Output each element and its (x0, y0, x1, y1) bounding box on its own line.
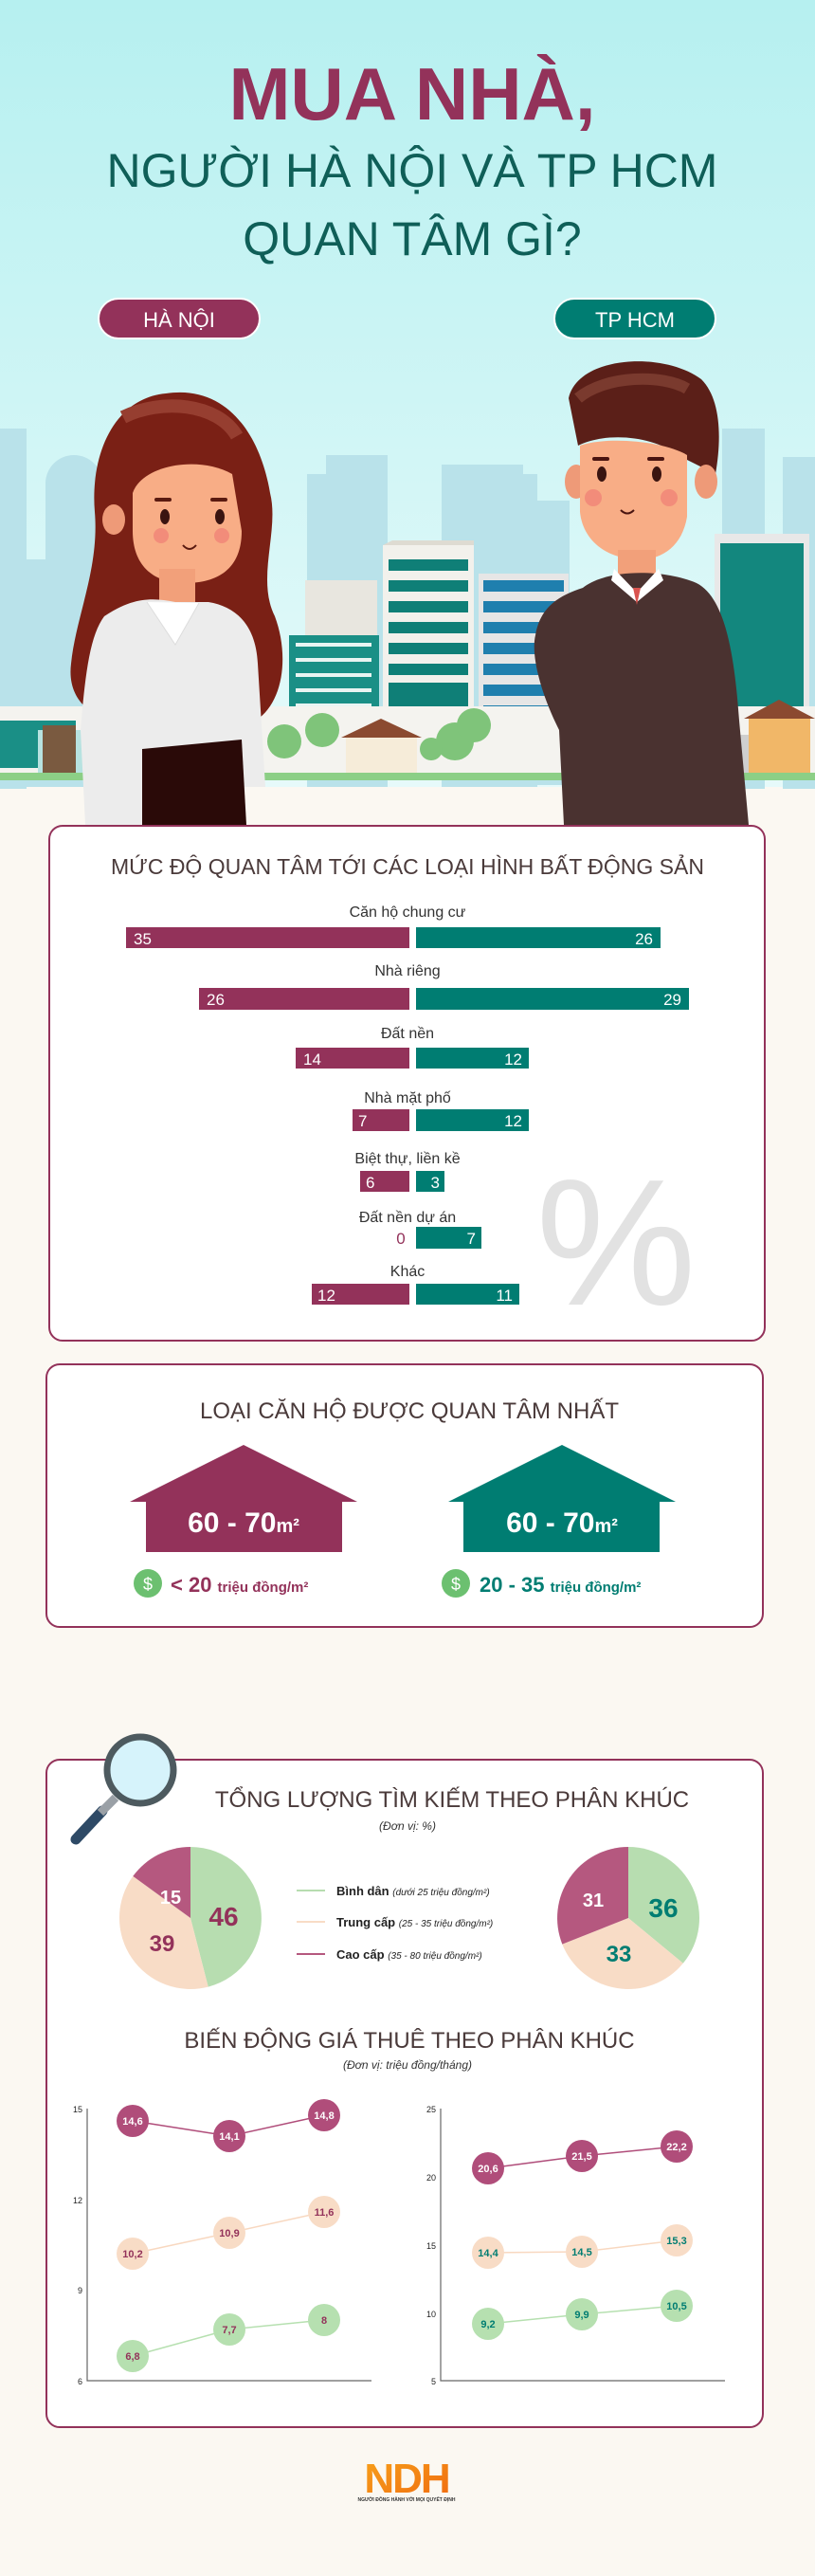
line chart: Ha Noi: 14,6 (122, 2116, 143, 2128)
bar chart: 14 (303, 1050, 321, 1069)
house: Ha Noi: 60 - 70m² (188, 1507, 299, 1539)
icon: magnifier (76, 1737, 173, 1839)
heading: rent: BIẾN ĐỘNG GIÁ THUÊ THEO PHÂN KHÚC (184, 2027, 635, 2054)
line chart: HCM: 15,3 (666, 2236, 687, 2247)
percent watermark: % (536, 1142, 696, 1343)
skyline background (0, 429, 815, 789)
line chart: Ha Noi: 15 (73, 2105, 82, 2114)
bar chart: Nhà riêng (374, 963, 441, 979)
line chart: HCM: 10,5 (666, 2301, 687, 2312)
legend: Cao cấp (35 - 80 triệu đồng/m²) (336, 1947, 482, 1962)
price: HCM (442, 1569, 641, 1598)
bar chart: 7 (358, 1112, 367, 1130)
bar chart: Căn hộ chung cư (350, 904, 466, 921)
title: MUA NHÀ, (228, 52, 596, 136)
line chart: Ha Noi: 10,2 (122, 2249, 143, 2260)
price: Ha Noi: < 20 triệu đồng/m² (171, 1573, 308, 1597)
price: Ha Noi: $ (143, 1575, 153, 1594)
heading: search volume: TỔNG LƯỢNG TÌM KIẾM THEO PHÂN KHÚC (215, 1786, 689, 1813)
bar chart: 7 (467, 1230, 476, 1248)
panel: property type interest (49, 826, 765, 1343)
line chart: HCM: 20 (426, 2173, 436, 2183)
badge: TP HCM: TP HCM (595, 308, 675, 332)
bar chart: 29 (663, 991, 681, 1009)
bar chart: Khác (390, 1264, 425, 1280)
line chart: HCM: 21,5 (571, 2151, 592, 2163)
buildings (0, 534, 815, 780)
house: HCM (448, 1445, 676, 1552)
bar chart: 6 (366, 1174, 374, 1192)
pie chart: HCM (557, 1847, 699, 1989)
line chart: HCM: 9,2 (480, 2319, 496, 2330)
heading: search volume (215, 1786, 689, 1833)
line chart: Ha Noi: 7,7 (222, 2325, 237, 2336)
bar chart: 12 (317, 1287, 335, 1305)
legend (297, 1884, 493, 1962)
line chart: Ha Noi: 6 (78, 2377, 82, 2386)
bar chart: Nhà mặt phố (364, 1090, 451, 1106)
bar chart: 35 (134, 930, 152, 948)
panel heading: MỨC ĐỘ QUAN TÂM TỚI CÁC LOẠI HÌNH BẤT ĐỘNG SẢN (111, 852, 704, 879)
line chart: HCM (426, 2105, 725, 2386)
badge: Ha Noi: HÀ NỘI (143, 308, 215, 332)
panel heading: LOẠI CĂN HỘ ĐƯỢC QUAN TÂM NHẤT (200, 1398, 619, 1424)
line chart: HCM: 9,9 (574, 2310, 589, 2321)
badge: Ha Noi (99, 299, 260, 338)
line chart: Ha Noi: 9 (78, 2286, 82, 2295)
panel: most wanted apartment type (46, 1364, 763, 1627)
pie chart: Ha Noi: 46 (208, 1902, 239, 1931)
line chart: HCM: 22,2 (666, 2142, 687, 2153)
pie chart: Ha Noi: 15 (160, 1888, 181, 1909)
man (534, 361, 749, 825)
price: HCM: 20 - 35 triệu đồng/m² (480, 1573, 641, 1597)
line chart: HCM: 25 (426, 2105, 436, 2114)
line chart: Ha Noi: 14,1 (219, 2131, 240, 2143)
line chart: HCM: 5 (431, 2377, 436, 2386)
bar chart: 26 (635, 930, 653, 948)
bar chart: 12 (504, 1112, 522, 1130)
house: Ha Noi (130, 1445, 357, 1552)
bar chart: 3 (431, 1174, 440, 1192)
heading: rent (184, 2027, 635, 2072)
line chart: Ha Noi: 14,8 (314, 2110, 335, 2122)
bar chart: 0 (396, 1230, 406, 1248)
bar chart: 12 (504, 1050, 522, 1069)
pie chart: HCM: 33 (607, 1942, 631, 1967)
title: QUAN TÂM GÌ? (243, 212, 582, 265)
title (107, 52, 717, 265)
heading: search volume: (Đơn vị: %) (379, 1819, 436, 1833)
legend: Trung cấp (25 - 35 triệu đồng/m²) (336, 1915, 493, 1929)
line chart: Ha Noi (73, 2099, 371, 2386)
line chart: HCM: 14,5 (571, 2247, 592, 2258)
line chart: Ha Noi: 10,9 (219, 2228, 240, 2239)
line chart: Ha Noi: 12 (73, 2196, 82, 2205)
legend: Bình dân (dưới 25 triệu đồng/m²) (336, 1884, 490, 1898)
woman (70, 393, 282, 825)
line chart: HCM: 14,4 (478, 2248, 499, 2259)
line chart: HCM: 15 (426, 2241, 436, 2251)
pie chart: Ha Noi (119, 1847, 262, 1989)
logo: NDH: NDH (364, 2456, 449, 2502)
pie chart: HCM: 31 (583, 1891, 604, 1911)
heading: rent: (Đơn vị: triệu đồng/tháng) (343, 2058, 472, 2072)
hero scene (0, 0, 815, 825)
bar chart: Đất nền dự án (359, 1210, 456, 1226)
logo: NDH: NGƯỜI ĐỒNG HÀNH VỚI MỌI QUYẾT ĐỊNH (358, 2495, 456, 2503)
title: NGƯỜI HÀ NỘI VÀ TP HCM (107, 144, 717, 197)
line chart: HCM: 20,6 (478, 2164, 498, 2175)
line chart: Ha Noi: 11,6 (315, 2207, 334, 2219)
bar chart: Biệt thự, liền kề (354, 1151, 461, 1167)
badge: TP HCM (554, 299, 715, 338)
line chart: Ha Noi: 6,8 (125, 2351, 140, 2363)
house: HCM: 60 - 70m² (506, 1507, 618, 1539)
price: Ha Noi (134, 1569, 308, 1598)
bar chart (126, 904, 689, 1305)
price: HCM: $ (451, 1575, 461, 1594)
line chart: HCM: 10 (426, 2310, 436, 2319)
bar chart: Đất nền (381, 1026, 434, 1042)
bar chart: 11 (496, 1287, 513, 1305)
pie chart: HCM: 36 (648, 1893, 679, 1923)
pie chart: Ha Noi: 39 (150, 1931, 174, 1957)
panel: search volume and rent (46, 1737, 763, 2427)
bar chart: 26 (207, 991, 225, 1009)
line chart: Ha Noi: 8 (321, 2315, 327, 2327)
